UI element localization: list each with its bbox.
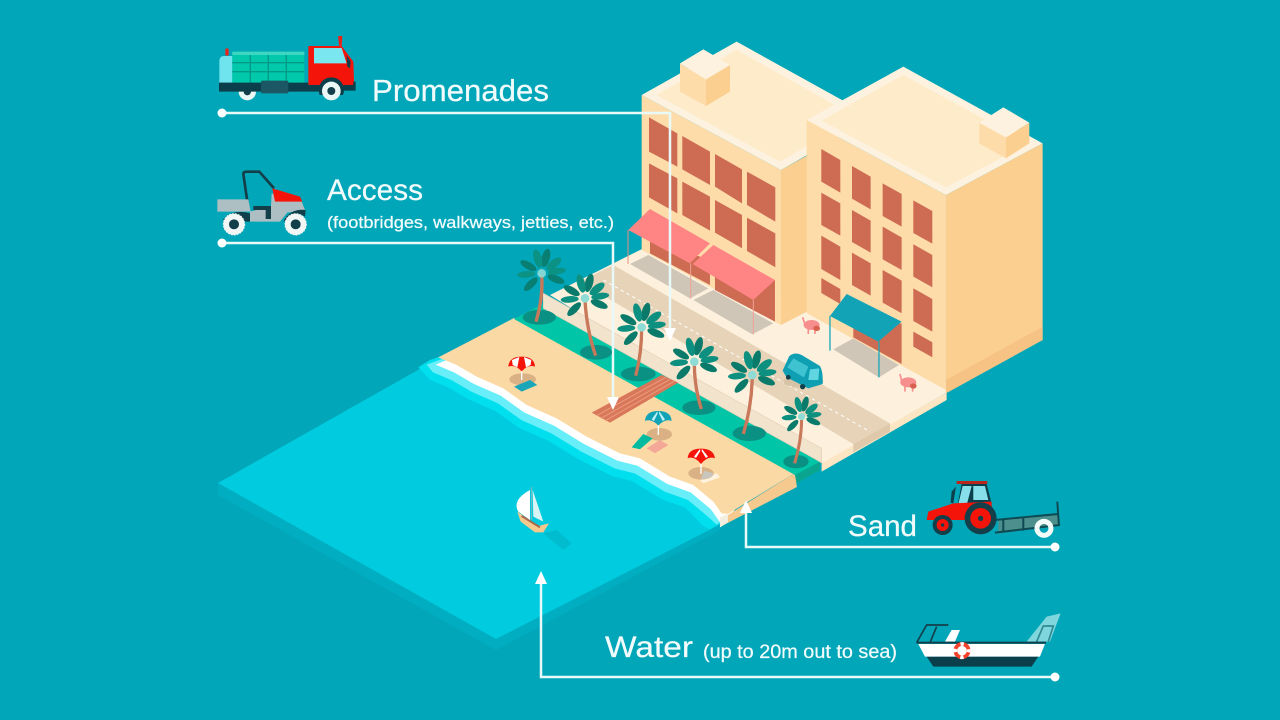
chimney	[680, 49, 730, 106]
sailboat	[517, 487, 572, 550]
palm two	[560, 273, 612, 360]
chimney	[979, 107, 1029, 158]
palm five	[728, 349, 777, 441]
label: water: Water	[605, 631, 693, 664]
umbrella three	[688, 449, 720, 483]
pink table one	[803, 317, 820, 334]
green strip	[514, 303, 820, 483]
palm trees	[517, 248, 822, 468]
palm three	[617, 302, 666, 381]
awnings and shopfronts	[508, 209, 917, 483]
road	[580, 265, 890, 452]
leader line: sand	[740, 500, 1060, 552]
label: access detail: (footbridges, walkways, jetties, etc.)	[327, 213, 614, 232]
umbrella two	[632, 411, 672, 453]
palm one	[517, 248, 566, 325]
blue van	[783, 354, 823, 389]
label: water detail: (up to 20m out to sea)	[703, 642, 897, 663]
shopfront three	[830, 294, 902, 377]
pink table two	[900, 374, 917, 392]
building two	[807, 67, 1043, 393]
leader line: water	[535, 571, 1060, 682]
boardwalk	[592, 375, 678, 423]
label: access: Access	[327, 174, 423, 207]
label: promenades: Promenades	[372, 73, 549, 108]
platform, wall and green strip	[514, 248, 947, 483]
leader line: promenades	[218, 108, 676, 341]
wave bands	[418, 333, 777, 529]
platform side	[822, 393, 947, 472]
access vehicle icon	[217, 172, 306, 235]
windows	[821, 149, 932, 357]
shopfront one	[628, 209, 710, 299]
sand panel	[438, 318, 797, 527]
umbrella one	[508, 357, 537, 392]
truck icon	[219, 36, 356, 103]
building one	[642, 42, 873, 325]
leader line: access	[218, 238, 619, 410]
tractor icon	[927, 481, 1060, 535]
label: sand: Sand	[848, 510, 917, 543]
windows	[649, 117, 775, 267]
water panel	[218, 333, 777, 650]
low wall	[543, 293, 822, 463]
palm four	[670, 336, 719, 415]
palm six	[782, 396, 822, 468]
shopfront two	[693, 245, 775, 334]
boat icon	[917, 613, 1061, 667]
platform top	[550, 248, 947, 463]
